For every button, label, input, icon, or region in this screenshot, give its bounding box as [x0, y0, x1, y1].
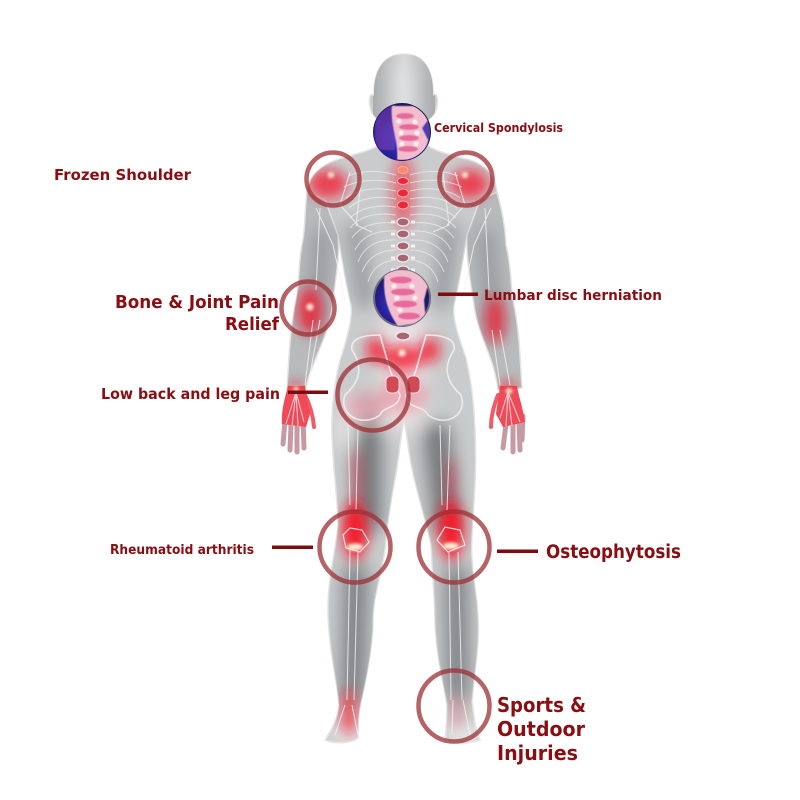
- circle: right shoulder: [440, 152, 492, 206]
- circle: elbow: [282, 282, 334, 334]
- circle: ankle: [418, 670, 490, 742]
- circle: left shoulder: [306, 152, 360, 206]
- leader line: osteophytosis: [497, 550, 538, 553]
- red pain glows: [290, 154, 515, 736]
- leg bones: [348, 425, 450, 510]
- shoulder blades and arm bones: [340, 172, 372, 232]
- circle: hip: [338, 360, 408, 430]
- spine: [386, 166, 420, 393]
- body shading: [314, 55, 494, 735]
- circle: right knee: [418, 512, 490, 582]
- bright pain points: [294, 172, 512, 550]
- leader line: low back: [288, 390, 328, 394]
- pelvis: [344, 335, 400, 420]
- label: Rheumatoid arthritis: Rheumatoid arthritis: [110, 543, 254, 558]
- figure: human body from behind: [282, 54, 525, 743]
- label: Cervical Spondylosis: Cervical Spondylosis: [434, 120, 563, 135]
- label: Sports and Outdoor Injuries: Outdoor: [497, 717, 585, 741]
- label: Low back and leg pain: Low back and leg pain: [101, 385, 280, 403]
- leader line: rheumatoid arthritis: [272, 546, 313, 549]
- bones and contour lines: [305, 171, 510, 735]
- label: Osteophytosis: Osteophytosis: [546, 542, 681, 563]
- label: Frozen Shoulder: Frozen Shoulder: [54, 166, 192, 184]
- body silhouette: [287, 54, 522, 743]
- inset: cervical vertebrae: [373, 103, 432, 161]
- inset: lumbar vertebrae: [373, 269, 431, 327]
- label: Bone and Joint Pain Relief: Relief: [225, 314, 279, 335]
- label: Bone and Joint Pain Relief: [115, 292, 279, 335]
- label: Sports and Outdoor Injuries: Injuries: [497, 741, 578, 765]
- ribs: [344, 171, 462, 282]
- label: Sports and Outdoor Injuries: Sports &: [497, 693, 586, 717]
- label: Sports and Outdoor Injuries: [497, 693, 586, 765]
- leader line: lumbar: [438, 292, 478, 296]
- circle: left knee: [320, 512, 390, 582]
- hands: [282, 386, 525, 452]
- label: Bone and Joint Pain Relief: Bone & Joint Pain: [115, 292, 279, 313]
- label: Lumbar disc herniation: Lumbar disc herniation: [484, 288, 662, 304]
